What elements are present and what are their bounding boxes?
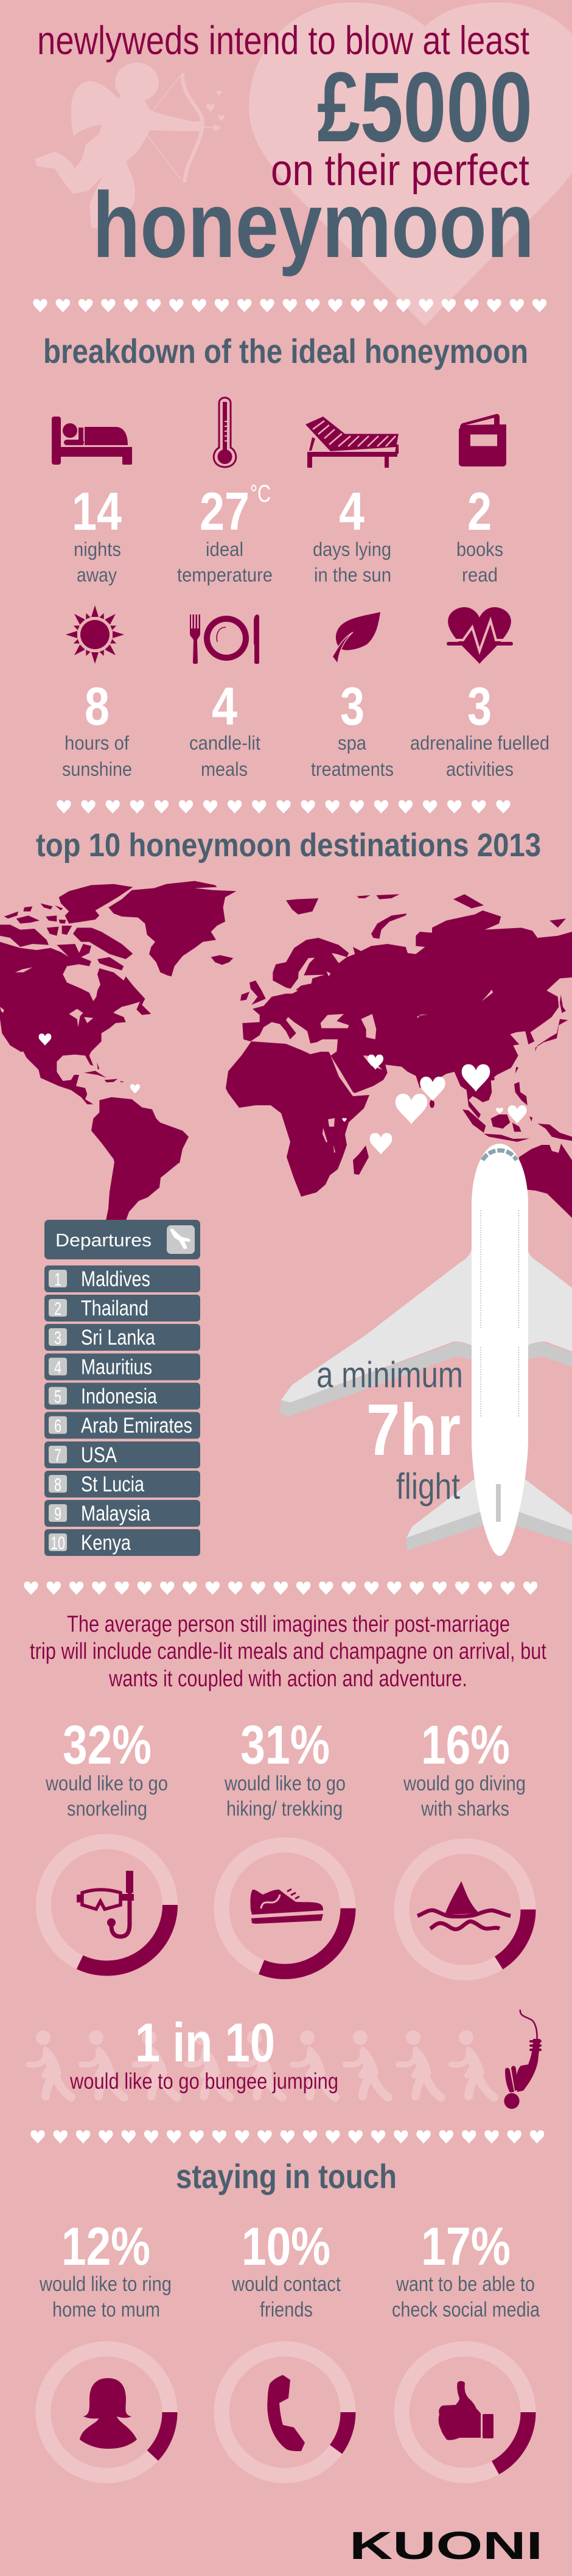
stat: social media 17%: want to be able to: [396, 2273, 535, 2296]
destination 9: 9: [54, 1504, 61, 1524]
stat: diving with sharks 16%: with sharks: [420, 1798, 509, 1821]
callout: minimum flight: [316, 1354, 463, 1507]
stat: hiking 31%: hiking/ trekking: [226, 1798, 343, 1821]
callout: minimum flight: flight: [396, 1466, 460, 1507]
icon: book: [459, 414, 506, 466]
stat: 4 candle-lit meals: 4: [212, 676, 237, 736]
stat: diving with sharks 16%: would go diving: [403, 1772, 526, 1795]
stat: 8 hours of sunshine: sunshine: [62, 758, 132, 780]
map destination hearts: [39, 1033, 526, 1155]
stat: 27C ideal temperature: °C: [250, 480, 271, 507]
stat: 4 days lying in the sun: [313, 481, 391, 586]
heart divider 2: [57, 800, 511, 814]
destination 10: [44, 1529, 200, 1556]
stat: 3 spa treatments: 3: [340, 676, 364, 736]
africa and madagascar: [226, 1041, 369, 1197]
destination 1: Maldives: [81, 1267, 150, 1291]
icon: heartbeat: [447, 607, 513, 664]
stat: hiking 31%: 31%: [240, 1715, 330, 1776]
stat: contact friends 10%: [221, 2216, 348, 2476]
stat: 3 adrenaline fuelled activities: adrenaline fuelled: [410, 732, 549, 754]
stat: contact friends 10%: friends: [260, 2298, 313, 2321]
icon: thermometer: [214, 398, 236, 467]
stat: 3 adrenaline fuelled activities: [410, 676, 549, 780]
destination 3: [44, 1324, 200, 1351]
stat: snorkeling 32%: 32%: [63, 1715, 152, 1776]
stat: snorkeling 32%: snorkeling: [67, 1798, 147, 1821]
destination 9: Malaysia: [81, 1502, 150, 1526]
destination 4: 4: [54, 1358, 61, 1378]
stat: 2 books read: 2: [467, 481, 492, 541]
ring chart: 12%: [43, 2349, 170, 2476]
destination 2: Thailand: [81, 1297, 148, 1320]
destination 3: 3: [54, 1328, 61, 1348]
stat: social media 17%: check social media: [392, 2298, 540, 2321]
stat: 3 spa treatments: spa: [338, 732, 366, 754]
stat: 4 days lying in the sun: 4: [339, 481, 364, 541]
stat: 3 spa treatments: [311, 676, 394, 780]
destination 7: USA: [81, 1443, 117, 1467]
world map: [0, 881, 572, 1220]
stat: social media 17%: 17%: [421, 2216, 511, 2276]
icon: bed: [52, 417, 132, 465]
logo: Kuoni: KUONI: [349, 2524, 543, 2567]
stat: contact friends 10%: would contact: [231, 2273, 341, 2296]
australia: [517, 1144, 572, 1218]
destination 5: 5: [54, 1387, 61, 1407]
stat: hiking 31%: would like to go: [224, 1772, 346, 1795]
destination 4: Mauritius: [81, 1356, 152, 1379]
intro paragraph: wants it coupled with action and adventure.: [108, 1666, 467, 1692]
stat: 8 hours of sunshine: [62, 676, 132, 780]
icon: woman: [80, 2378, 137, 2449]
heart divider 1: [33, 299, 546, 312]
icon: leaf: [332, 612, 380, 664]
destination 7: 7: [54, 1446, 61, 1466]
destination 8: 8: [54, 1475, 61, 1495]
stat: 14 nights away: 14: [72, 481, 122, 541]
ring chart: 16%: [402, 1846, 528, 1973]
stat: 2 books read: [456, 481, 503, 586]
heart divider 4: [30, 2130, 544, 2144]
stat: ring home 12%: 12%: [61, 2216, 150, 2276]
icon: sun: [66, 605, 124, 664]
stat: snorkeling 32%: would like to go: [45, 1772, 168, 1795]
destination 4: [44, 1353, 200, 1380]
stat: 3 spa treatments: treatments: [311, 758, 394, 780]
destination 1: 1: [54, 1270, 61, 1290]
panel: bungee 1 in 10: 1 in 10: [135, 2013, 275, 2074]
icon: bungee jumper: [504, 2010, 542, 2109]
stat: 8 hours of sunshine: 8: [85, 676, 110, 736]
stat: 27C ideal temperature: ideal: [206, 538, 243, 560]
stat: 2 books read: read: [462, 564, 498, 586]
heart divider 3: [24, 1582, 537, 1595]
board header: [44, 1220, 200, 1259]
headline: [37, 18, 534, 277]
callout: minimum flight: 7hr: [366, 1389, 461, 1471]
departures board: [44, 1220, 200, 1556]
icon: snorkel: [77, 1871, 134, 1937]
destination 6: [44, 1412, 200, 1438]
stat: 27C ideal temperature: 27: [200, 481, 249, 541]
stat: 14 nights away: away: [77, 564, 117, 586]
ring chart: 17%: [402, 2349, 528, 2476]
stat: 3 adrenaline fuelled activities: 3: [467, 676, 492, 736]
stat: social media 17%: [392, 2216, 540, 2476]
stat: 27C ideal temperature: [177, 480, 273, 586]
destination 10: Kenya: [81, 1531, 131, 1555]
stat: ring home 12%: would like to ring: [39, 2273, 172, 2296]
ring chart: 32%: [44, 1842, 170, 1968]
panel: bungee 1 in 10: [29, 2010, 542, 2109]
icon: walking shoe: [250, 1889, 323, 1924]
destination 9: [44, 1500, 200, 1527]
stat: hiking 31%: [221, 1715, 348, 1972]
stat: diving with sharks 16%: [402, 1715, 528, 1973]
icon: sun lounger: [305, 417, 399, 468]
icon: shark fin: [417, 1881, 511, 1929]
stat: 27C ideal temperature: temperature: [177, 564, 273, 586]
large background heart: [249, 2, 572, 326]
stat: 8 hours of sunshine: hours of: [65, 732, 129, 754]
icon: thumbs up: [439, 2381, 494, 2440]
stat: 2 books read: books: [456, 538, 503, 560]
heading: staying in touch: staying in touch: [176, 2157, 397, 2195]
callout: minimum flight: a minimum: [316, 1354, 463, 1395]
board header: Departures: [55, 1230, 152, 1251]
destination 7: [44, 1441, 200, 1468]
stat: 14 nights away: nights: [74, 538, 121, 560]
stat: 4 candle-lit meals: meals: [201, 758, 248, 780]
stat: contact friends 10%: 10%: [242, 2216, 330, 2276]
stat: ring home 12%: home to mum: [52, 2298, 160, 2321]
panel: bungee 1 in 10: would like to go bungee jumping: [69, 2069, 338, 2094]
stat: 4 candle-lit meals: [189, 676, 260, 780]
destination 8: St Lucia: [81, 1473, 144, 1496]
stat: 3 adrenaline fuelled activities: activities: [446, 758, 514, 780]
stat: 4 days lying in the sun: in the sun: [314, 564, 391, 586]
stat: diving with sharks 16%: 16%: [421, 1715, 510, 1776]
ring chart: 10%: [221, 2349, 348, 2476]
stat: 4 days lying in the sun: days lying: [313, 538, 391, 560]
headline: on their perfect: [271, 146, 529, 195]
stat: snorkeling 32%: [44, 1715, 170, 1968]
illustration: cupid: [35, 63, 225, 228]
destination 10: 10: [51, 1533, 65, 1554]
destination 2: 2: [54, 1299, 61, 1319]
stat: 14 nights away: [72, 481, 122, 586]
destination 6: Arab Emirates: [81, 1414, 192, 1437]
destination 3: Sri Lanka: [81, 1326, 155, 1350]
icon: telephone: [267, 2375, 305, 2451]
destination 8: [44, 1471, 200, 1497]
south america lower: [106, 1162, 180, 1220]
illustration: aeroplane: [279, 1144, 572, 1556]
stat: 4 candle-lit meals: candle-lit: [189, 732, 260, 754]
stat: ring home 12%: [39, 2216, 172, 2476]
destination 6: 6: [54, 1416, 61, 1436]
destination 5: Indonesia: [81, 1385, 157, 1408]
destination 1: [44, 1265, 200, 1292]
ring chart: 31%: [221, 1845, 348, 1972]
figures: row of walkers: [29, 2030, 494, 2097]
destination 5: [44, 1382, 200, 1409]
intro paragraph: [30, 1611, 546, 1692]
icon: plate and cutlery: [190, 614, 259, 664]
panel: breakdown stats: [52, 398, 549, 780]
destination 2: [44, 1295, 200, 1321]
